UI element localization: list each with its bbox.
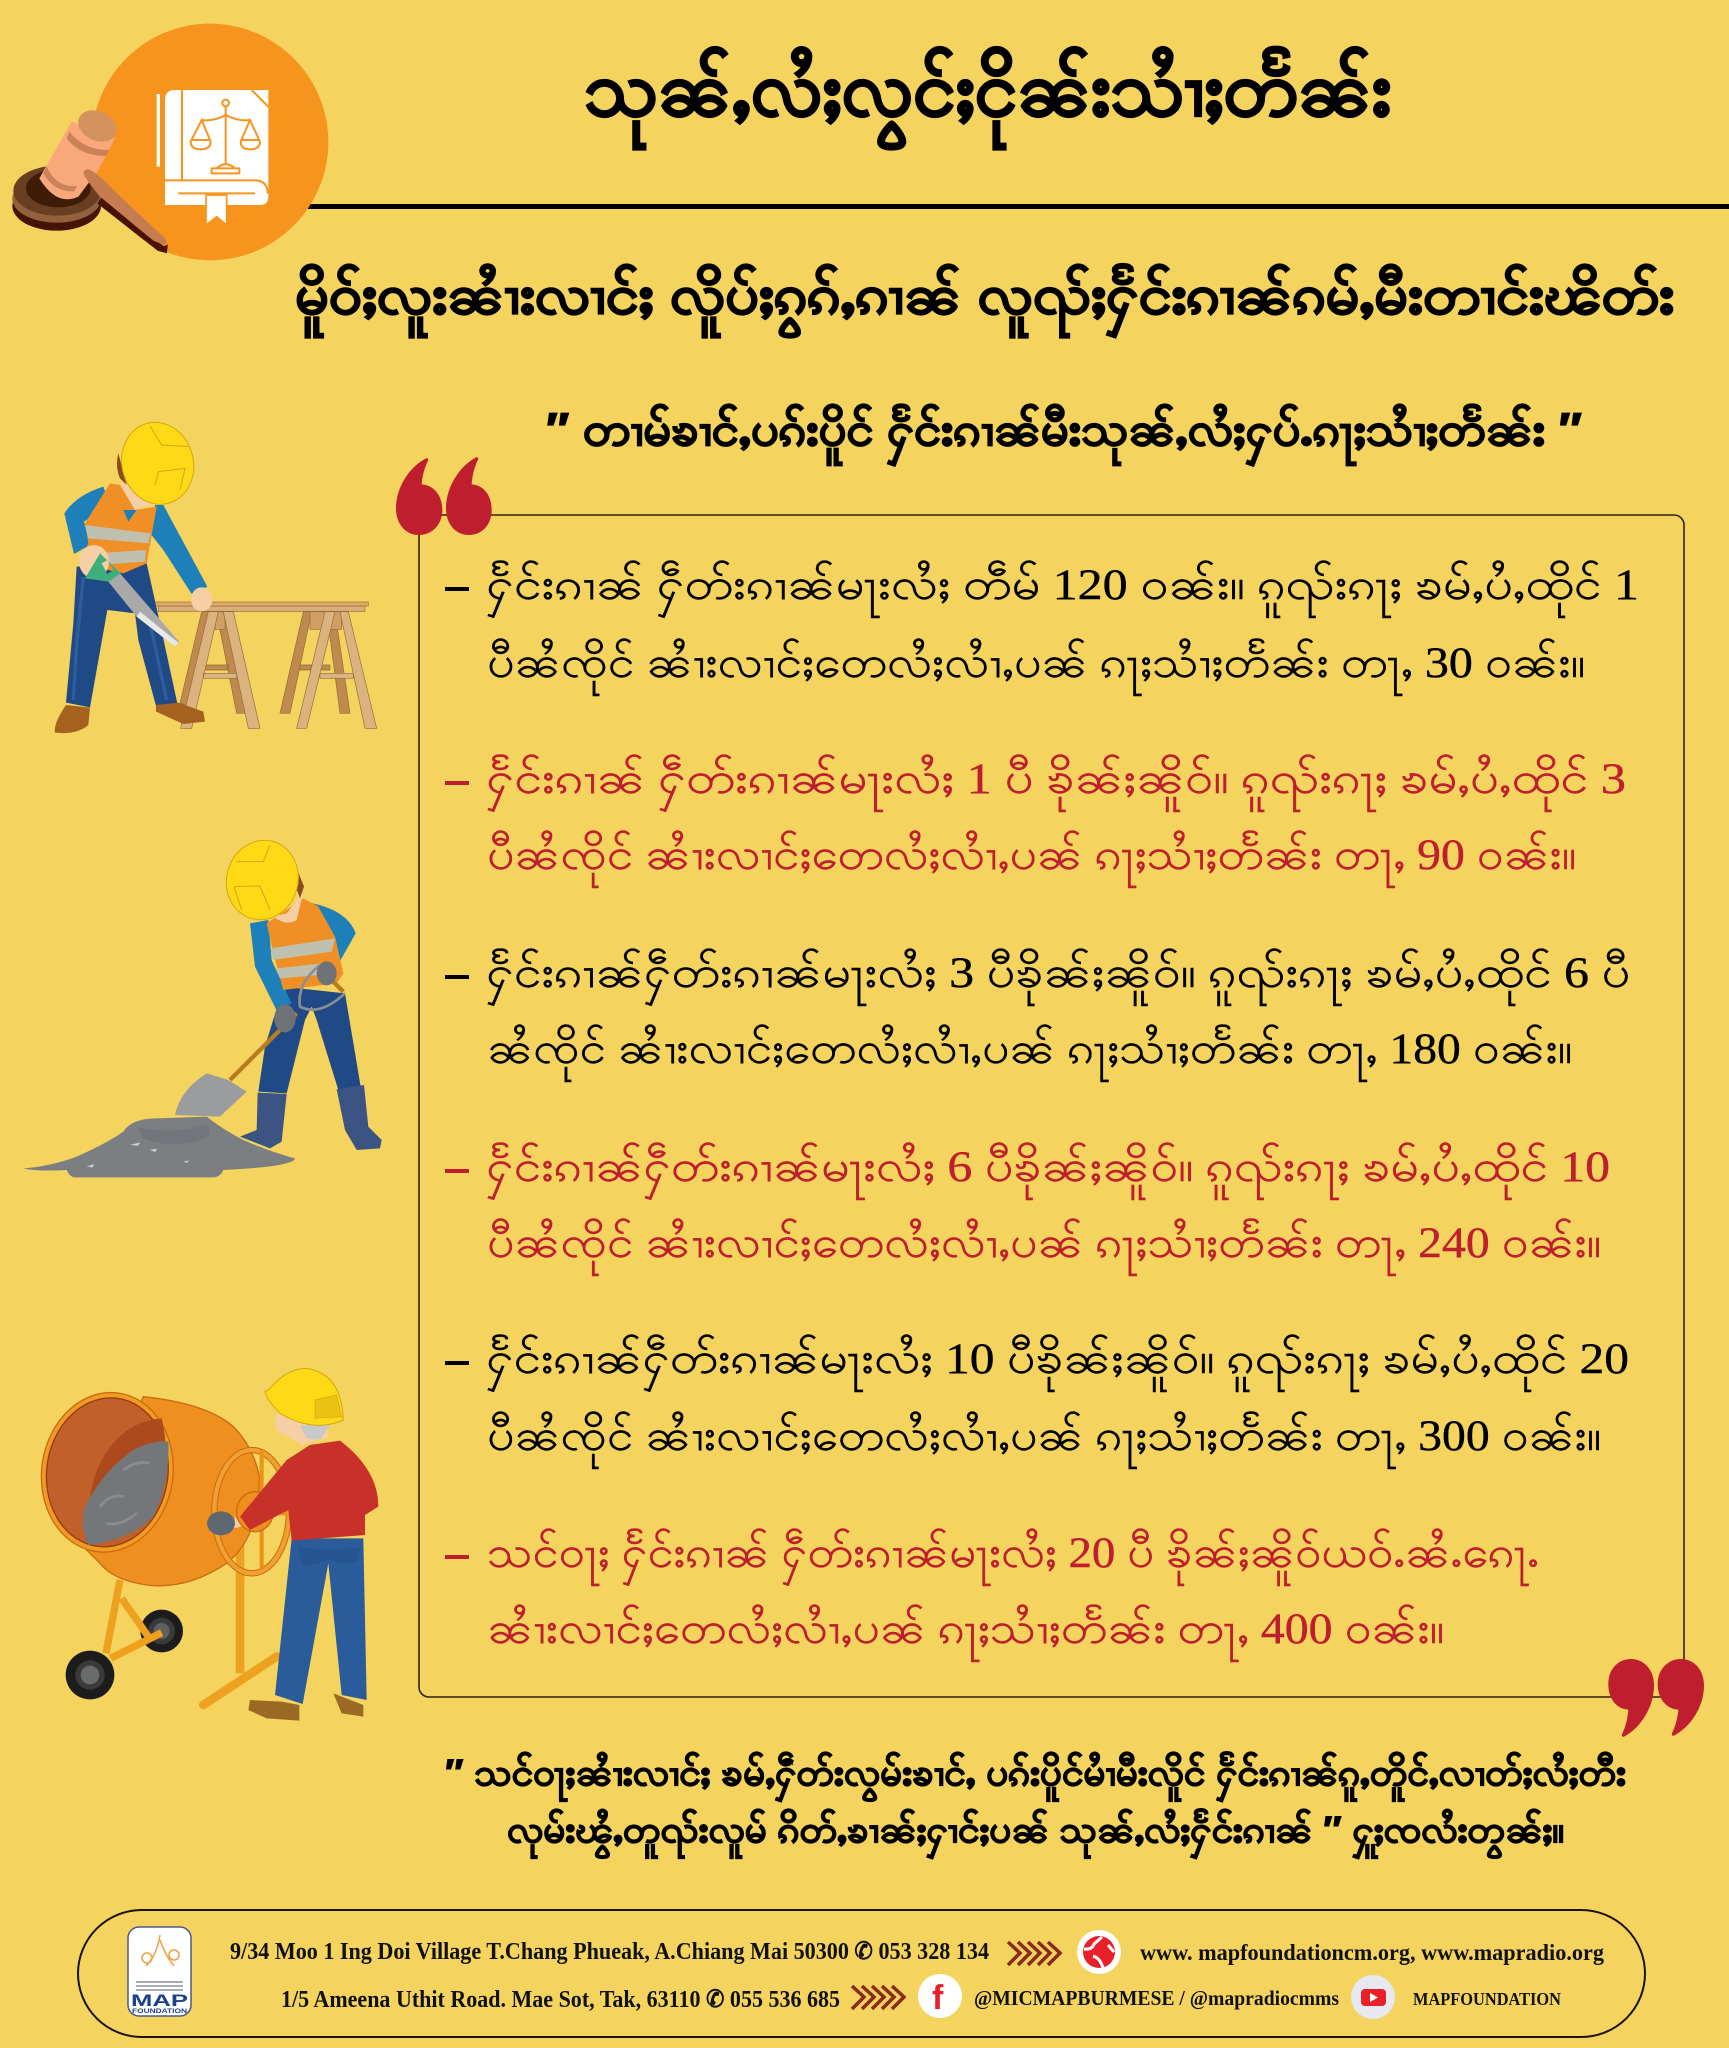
title: သုၼ်ႇလႆႈလွင်ႈငိုၼ်းသၢႆႈတႅၼ်း <box>584 46 1391 150</box>
icon: gavel <box>12 104 167 252</box>
icon: MAP Foundation logo <box>128 1927 191 2016</box>
Mae Sot address: 1/5 Ameena Uthit Road. Mae Sot, Tak, 63110 ✆ 055 536 685 <box>281 1987 840 2013</box>
rule 5: ten years: ႁႅင်းၵၢၼ်ႁဵတ်းၵၢၼ်မႃးလႆႈ 10 ပီၶိုၼ်ႈၼိူဝ်။ ၵူၺ်းၵႃႈ ၶမ်ႇပႆႇထိုင် 20 <box>486 1335 1629 1393</box>
panel: rules box <box>396 457 1704 1737</box>
closing statement: လုမ်းၽွႆႇတူၺ်းလူမ် ၵိတ်ႇၶၢၼ်ႈႁၢင်ႈပၼ် သုၼ်ႇလႆႈႁႅင်းၵၢၼ် ″ ႁူႈၸလႆးတွၼ်ႈ။ <box>507 1807 1564 1860</box>
rule 3: three years: ၼႆၸိုင် ၼၢႆးလၢင်ႈတေလႆႈလၢႆႇပၼ် ၵႃႈသၢႆႈတႅၼ်း တႃႇ 180 ဝၼ်း။ <box>487 1025 1572 1082</box>
Chiang Mai address: 9/34 Moo 1 Ing Doi Village T.Chang Phueak, A.Chiang Mai 50300 ✆ 053 328 134 <box>230 1939 989 1965</box>
icon: facebook <box>918 1974 962 2018</box>
rule 2: one year: ႁႅင်းၵၢၼ် ႁဵတ်းၵၢၼ်မႃးလႆႈ 1 ပီ ၶိုၼ်ႈၼိူဝ်။ ၵူၺ်းၵႃႈ ၶမ်ႇပႆႇထိုင် 3 <box>486 755 1626 813</box>
subtitle: မိူဝ်ႈလူးၼၢႆးလၢင်ႈ လိူပ်ႈၵွၵ်ႇၵၢၼ် လူၺ်ႈႁႅင်းၵၢၼ်ၵမ်ႇမီးတၢင်းၽိတ်း <box>295 265 1674 338</box>
footer: contact panel <box>78 1910 1645 2037</box>
icon: law book and gavel badge <box>12 24 328 260</box>
rule 1: under 120 days: ပီၼႆၸိုင် ၼၢႆးလၢင်ႈတေလႆႈလၢႆႇပၼ် ၵႃႈသၢႆႈတႅၼ်း တႃႇ 30 ဝၼ်း။ <box>487 639 1585 696</box>
icon: globe <box>1077 1930 1121 1974</box>
rule 4: six years: ႁႅင်းၵၢၼ်ႁဵတ်းၵၢၼ်မႃးလႆႈ 6 ပီၶိုၼ်ႈၼိူဝ်။ ၵူၺ်းၵႃႈ ၶမ်ႇပႆႇထိုင် 10 <box>486 1143 1610 1201</box>
header rule <box>308 204 1729 209</box>
rule 3: three years <box>445 949 1630 1082</box>
rule 6: twenty years: ၼၢႆးလၢင်ႈတေလႆႈလၢႆႇပၼ် ၵႃႈသၢႆႈတႅၼ်း တႃႇ 400 ဝၼ်း။ <box>487 1605 1444 1662</box>
rule 5: ten years: ပီၼႆၸိုင် ၼၢႆးလၢင်ႈတေလႆႈလၢႆႇပၼ် ၵႃႈသၢႆႈတႅၼ်း တႃႇ 300 ဝၼ်း။ <box>487 1412 1601 1469</box>
illustration: worker with shovel <box>23 832 382 1177</box>
rule 6: twenty years <box>445 1529 1539 1662</box>
icon: MAP Foundation logo: MAP <box>131 1991 188 2010</box>
arrow: chevrons to social <box>852 1986 904 2009</box>
illustration: worker with cement mixer <box>31 1368 378 1721</box>
icon: closing quotation mark <box>1608 1659 1704 1737</box>
icon: law book <box>157 90 268 225</box>
icon: facebook: f <box>932 1979 944 2017</box>
rule 3: three years: ႁႅင်းၵၢၼ်ႁဵတ်းၵၢၼ်မႃးလႆႈ 3 ပီၶိုၼ်ႈၼိူဝ်။ ၵူၺ်းၵႃႈ ၶမ်ႇပႆႇထိုင် 6 ပီ <box>486 949 1630 1007</box>
icon: MAP Foundation logo: FOUNDATION <box>132 2008 187 2015</box>
rule 6: twenty years: သင်ဝႃႈ ႁႅင်းၵၢၼ် ႁဵတ်းၵၢၼ်မႃးလႆႈ 20 ပီ ၶိုၼ်ႈၼိူဝ်ယဝ်ႉၼႆႉၵေႃႉ <box>487 1529 1539 1587</box>
illustration: carpenter with saw <box>55 414 377 733</box>
sawhorses and plank <box>97 602 377 728</box>
youtube channel name: MAPFOUNDATION <box>1413 1989 1561 2009</box>
rule 5: ten years <box>445 1335 1629 1469</box>
arrow: chevrons to website <box>1008 1942 1060 1965</box>
quoted heading: ″ တၢမ်ၶၢင်ႇပၵ်းပိူင် ႁႅင်းၵၢၼ်မီးသုၼ်ႇလႆႈႁပ်ႉၵႃႈသၢႆႈတႅၼ်း ″ <box>546 402 1582 467</box>
rule 4: six years: ပီၼႆၸိုင် ၼၢႆးလၢင်ႈတေလႆႈလၢႆႇပၼ် ၵႃႈသၢႆႈတႅၼ်း တႃႇ 240 ဝၼ်း။ <box>487 1219 1601 1276</box>
rule 2: one year: ပီၼႆၸိုင် ၼၢႆးလၢင်ႈတေလႆႈလၢႆႇပၼ် ၵႃႈသၢႆႈတႅၼ်း တႃႇ 90 ဝၼ်း။ <box>487 831 1576 888</box>
rule 1: under 120 days: ႁႅင်းၵၢၼ် ႁဵတ်းၵၢၼ်မႃးလႆႈ တဵမ် 120 ဝၼ်း။ ၵူၺ်းၵႃႈ ၶမ်ႇပႆႇထိုင် 1 <box>486 561 1639 619</box>
rule 4: six years <box>445 1143 1610 1276</box>
icon: opening quotation mark <box>396 457 492 535</box>
rule 1: under 120 days <box>445 561 1639 696</box>
social handles: @MICMAPBURMESE / @mapradiocmms <box>974 1986 1339 2010</box>
closing statement: ″ သင်ဝႃႈၼၢႆးလၢင်ႈ ၶမ်ႇႁဵတ်းလွမ်းၶၢင်ႇ ပၵ်းပိူင်မၢႆမီးလိူင် ႁႅင်းၵၢၼ်ၵူႇတိူင်ႇလၢတ်ႈလႆႈတီး <box>445 1750 1626 1803</box>
websites: www. mapfoundationcm.org, www.mapradio.org <box>1140 1940 1604 1965</box>
rule 2: one year <box>445 755 1626 888</box>
closing statement <box>445 1750 1626 1860</box>
icon: youtube <box>1351 1975 1395 2019</box>
